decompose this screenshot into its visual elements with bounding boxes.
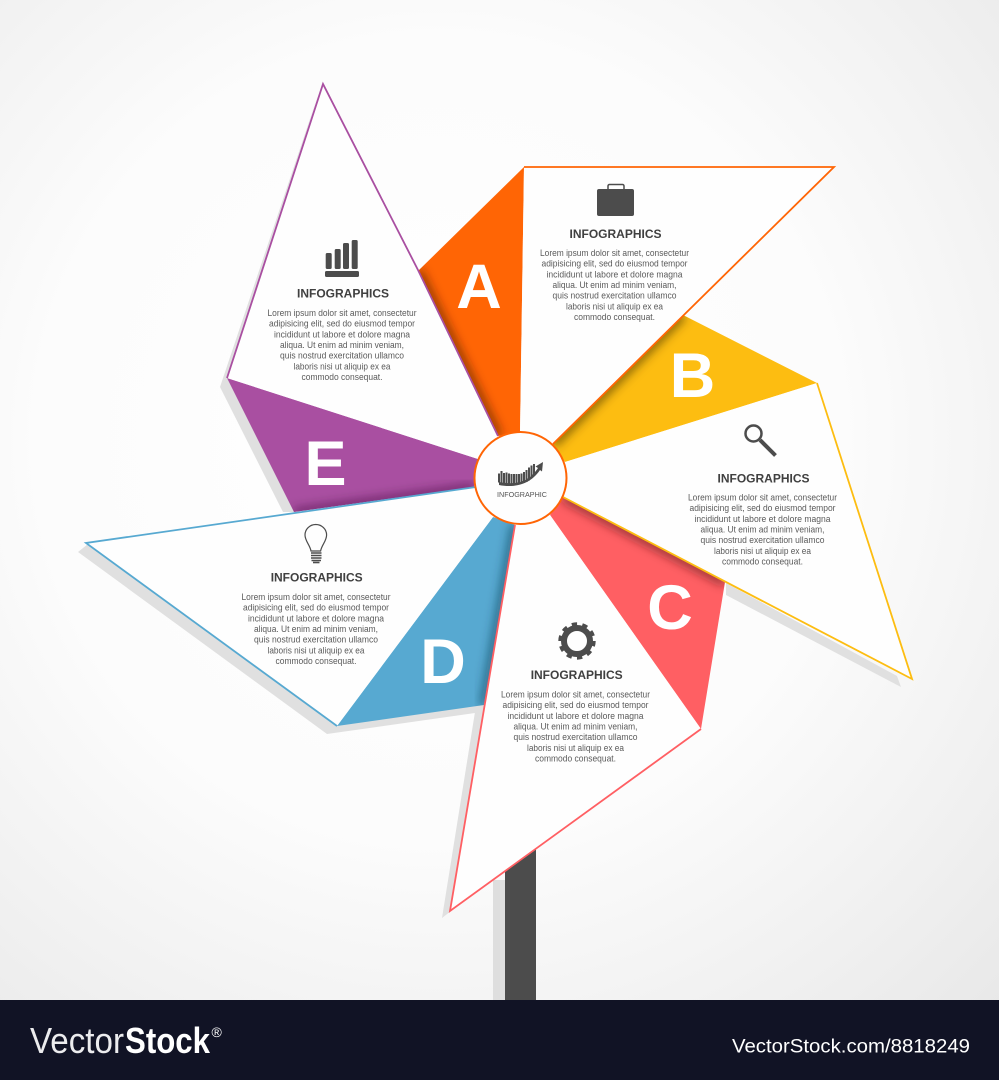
footer bar	[0, 1000, 999, 1080]
heading A: INFOGRAPHICS	[570, 227, 662, 241]
text block A: laboris nisi ut aliquip ex ea	[566, 301, 663, 311]
heading E: INFOGRAPHICS	[297, 286, 389, 300]
center hub	[474, 432, 566, 524]
text block A: incididunt ut labore et dolore magna	[546, 269, 683, 279]
text block B: commodo consequat.	[722, 556, 803, 566]
text block C: commodo consequat.	[535, 754, 616, 764]
icon: light bulb	[305, 524, 327, 562]
text block E: adipisicing elit, sed do eiusmod tempor	[269, 319, 415, 329]
blade C: red	[550, 497, 725, 729]
inner shadow E	[294, 487, 474, 512]
icon: magnifier	[746, 426, 776, 456]
text block C: aliqua. Ut enim ad minim veniam,	[514, 722, 638, 732]
panel: A	[520, 167, 834, 444]
text block C: adipisicing elit, sed do eiusmod tempor	[502, 700, 649, 710]
drop shadows behind blades	[78, 95, 901, 918]
logo: Stock	[125, 1020, 211, 1061]
text block B: laboris nisi ut aliquip ex ea	[714, 546, 811, 556]
footer url: VectorStock.com/8818249	[732, 1036, 970, 1058]
text block A: commodo consequat.	[574, 312, 655, 322]
blade D: blue	[337, 517, 515, 726]
hub label: INFOGRAPHIC	[497, 490, 548, 499]
logo: ®	[212, 1024, 222, 1040]
letter D: D	[420, 627, 466, 697]
text block C: quis nostrud exercitation ullamco	[514, 732, 638, 742]
text block D: commodo consequat.	[276, 656, 356, 666]
text block A: Lorem ipsum dolor sit amet, consectetur	[540, 248, 689, 258]
inner shadow B	[553, 315, 683, 444]
text block B: aliqua. Ut enim ad minim veniam,	[700, 524, 824, 534]
text block A	[540, 248, 689, 322]
heading C: INFOGRAPHICS	[531, 668, 623, 682]
text block A: aliqua. Ut enim ad minim veniam,	[552, 280, 676, 290]
text block B: incididunt ut labore et dolore magna	[694, 514, 831, 524]
panel: C	[450, 515, 701, 911]
text block E: commodo consequat.	[302, 372, 382, 382]
text block D: laboris nisi ut aliquip ex ea	[268, 645, 365, 655]
text block A: adipisicing elit, sed do eiusmod tempor	[542, 259, 688, 269]
text block C: incididunt ut labore et dolore magna	[508, 711, 644, 721]
text block B: adipisicing elit, sed do eiusmod tempor	[690, 503, 836, 513]
logo: Vector	[30, 1020, 124, 1061]
inner shadow C	[563, 497, 725, 582]
panel: B	[563, 383, 912, 679]
text block E: incididunt ut labore et dolore magna	[274, 329, 410, 339]
inner shadow A	[418, 271, 498, 436]
text block D: quis nostrud exercitation ullamco	[254, 635, 378, 645]
text block C	[501, 690, 650, 764]
text block B: Lorem ipsum dolor sit amet, consectetur	[688, 492, 837, 502]
panel: E	[227, 83, 498, 459]
letter B: B	[670, 341, 715, 411]
pole	[505, 845, 536, 1000]
pole shadow	[493, 880, 505, 1000]
letter A: A	[456, 252, 502, 322]
text block D: Lorem ipsum dolor sit amet, consectetur	[242, 592, 391, 602]
text block B	[688, 492, 837, 566]
icon: growth chart	[499, 462, 543, 486]
text block E: Lorem ipsum dolor sit amet, consectetur	[268, 308, 417, 318]
text block D	[242, 592, 391, 666]
text block E: aliqua. Ut enim ad minim veniam,	[280, 340, 404, 350]
text block E: quis nostrud exercitation ullamco	[280, 351, 404, 361]
blade E: purple	[227, 378, 478, 512]
letter E: E	[304, 429, 347, 499]
icon: bar chart	[325, 240, 359, 277]
heading D: INFOGRAPHICS	[271, 570, 363, 584]
blade A: orange	[418, 167, 524, 436]
blade B: yellow	[553, 315, 817, 462]
heading B: INFOGRAPHICS	[718, 472, 810, 486]
text block D: aliqua. Ut enim ad minim veniam,	[254, 624, 378, 634]
text block D: adipisicing elit, sed do eiusmod tempor	[243, 603, 389, 613]
inner shadow D	[484, 525, 515, 705]
text block C: laboris nisi ut aliquip ex ea	[527, 743, 624, 753]
text block D: incididunt ut labore et dolore magna	[248, 613, 384, 623]
text block C: Lorem ipsum dolor sit amet, consectetur	[501, 690, 650, 700]
panel: D	[86, 487, 493, 726]
text block A: quis nostrud exercitation ullamco	[552, 291, 677, 301]
text block E: laboris nisi ut aliquip ex ea	[294, 361, 391, 371]
text block E	[268, 308, 417, 382]
letter C: C	[647, 573, 693, 643]
logo	[30, 1020, 222, 1061]
icon: briefcase	[597, 184, 634, 216]
text block B: quis nostrud exercitation ullamco	[700, 535, 825, 545]
icon: gear	[560, 624, 594, 658]
